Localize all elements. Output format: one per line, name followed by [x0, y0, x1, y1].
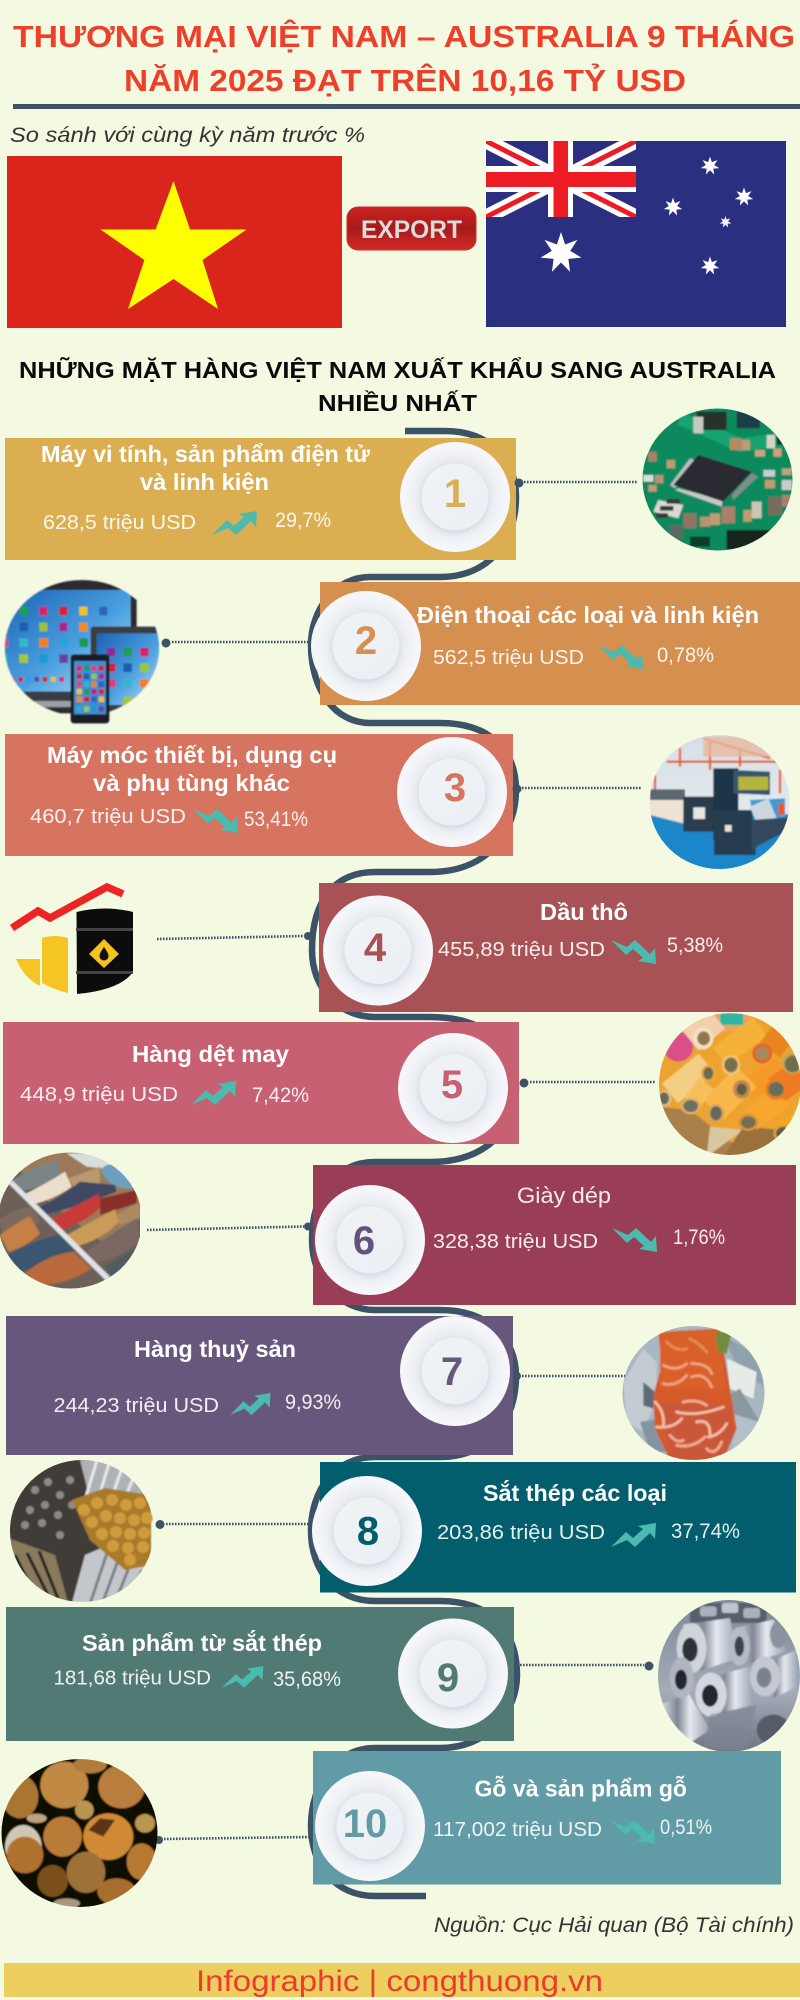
connector 5 — [520, 1078, 655, 1088]
item 1 name: và linh kiện — [140, 469, 269, 495]
panel: item 1 computers — [5, 438, 516, 560]
item 7 value: 244,23 triệu USD — [54, 1395, 219, 1417]
item 2 percent: 0,78% — [657, 644, 714, 667]
number badge 9: 9 — [437, 1656, 459, 1700]
icon: Vietnam flag — [7, 156, 342, 328]
item 9 name: Sản phẩm từ sắt thép — [82, 1629, 322, 1656]
image: tablets and phone — [3, 580, 161, 723]
connector 4 — [157, 932, 312, 940]
connector 2 — [162, 638, 308, 648]
item 3 percent: 53,41% — [244, 808, 308, 831]
arrow: down — [612, 1228, 657, 1252]
snake connector line — [311, 431, 517, 1896]
item 5 name: Hàng dệt may — [132, 1041, 289, 1067]
item 8 percent: 37,74% — [671, 1520, 740, 1543]
number badge 4 — [323, 896, 433, 1006]
item 2 name: Điện thoại các loại và linh kiện — [417, 602, 759, 628]
image: industrial machine — [647, 733, 793, 874]
item 4 name: Dầu thô — [540, 899, 628, 925]
image: shoes on shelf — [0, 1150, 142, 1292]
item 7 name: Hàng thuỷ sản — [134, 1336, 296, 1362]
icon: export button: EXPORT — [361, 216, 462, 244]
arrow: down — [598, 645, 643, 669]
item 4 value: 455,89 triệu USD — [438, 939, 605, 961]
subtitle: comparison note: So sánh với cùng kỳ năm trước % — [10, 124, 365, 147]
item 5 percent: 7,42% — [252, 1084, 309, 1107]
arrow: up — [230, 1393, 270, 1415]
image: shrimp and fish — [622, 1326, 764, 1460]
number badge 3 — [397, 737, 507, 847]
item 3 name: Máy móc thiết bị, dụng cụ — [47, 742, 337, 768]
title — [13, 18, 795, 98]
arrow: up — [611, 1523, 656, 1547]
icon: oil barrel and coins — [12, 887, 133, 994]
panel: item 5 textiles — [3, 1022, 519, 1144]
item 3 name: và phụ tùng khác — [93, 770, 290, 796]
section heading: NHIỀU NHẤT — [318, 389, 477, 416]
image: fabric rolls — [657, 1012, 800, 1158]
arrow: up — [222, 1666, 263, 1688]
image: steel coils — [650, 1598, 800, 1755]
item 9 percent: 35,68% — [273, 1668, 341, 1691]
number badge 6 — [315, 1185, 425, 1295]
panel: item 6 footwear — [313, 1165, 796, 1305]
number badge 10: 10 — [343, 1802, 387, 1846]
arrow: down — [193, 809, 238, 833]
item 3 name — [47, 742, 337, 796]
connector 10 — [155, 1836, 310, 1844]
item 6 value: 328,38 triệu USD — [433, 1231, 598, 1253]
item 2 value: 562,5 triệu USD — [433, 647, 584, 669]
item 10 value: 117,002 triệu USD — [433, 1819, 602, 1841]
item 8 name: Sắt thép các loại — [483, 1479, 667, 1506]
section heading — [19, 356, 776, 416]
number badge 3: 3 — [444, 766, 466, 810]
arrow: down — [611, 940, 656, 964]
arrow: up — [212, 511, 257, 535]
number badge 7 — [400, 1316, 510, 1426]
footer band — [4, 1963, 800, 1998]
item 10 percent: 0,51% — [660, 1816, 712, 1839]
source note: Nguồn: Cục Hải quan (Bộ Tài chính) — [434, 1914, 794, 1937]
number badge 5: 5 — [441, 1063, 463, 1107]
item 5 value: 448,9 triệu USD — [20, 1084, 178, 1106]
number badge 10 — [315, 1771, 425, 1881]
number badge 9 — [398, 1618, 508, 1728]
image: steel bars — [10, 1460, 154, 1602]
number badge 2 — [311, 591, 421, 701]
item 4 percent: 5,38% — [667, 934, 723, 957]
panel: item 9 steel products — [6, 1607, 514, 1741]
number badge 8: 8 — [357, 1510, 379, 1554]
item 8 value: 203,86 triệu USD — [437, 1522, 605, 1544]
number badge 8 — [312, 1476, 422, 1586]
item 1 value: 628,5 triệu USD — [43, 512, 196, 534]
panel: item 2 phones — [311, 582, 800, 705]
connector 6 — [147, 1222, 312, 1230]
item 10 name: Gỗ và sản phẩm gỗ — [474, 1774, 687, 1802]
icon: export button — [347, 207, 476, 250]
item 6 percent: 1,76% — [673, 1226, 725, 1249]
title: NĂM 2025 ĐẠT TRÊN 10,16 TỶ USD — [124, 62, 686, 98]
icon: Australia flag — [486, 141, 786, 327]
connector 1 — [514, 478, 638, 488]
footer band: Infographic | congthuong.vn — [196, 1965, 603, 1998]
number badge 7: 7 — [441, 1350, 463, 1394]
panel: item 7 seafood — [6, 1316, 513, 1455]
connector 9 — [520, 1662, 654, 1670]
panel: item 10 wood — [313, 1751, 781, 1884]
panel: item 3 machinery — [5, 734, 513, 856]
arrow: down — [610, 1820, 655, 1844]
item 1 name: Máy vi tính, sản phẩm điện tử — [41, 441, 370, 467]
number badge 6: 6 — [353, 1219, 375, 1263]
item 7 percent: 9,93% — [285, 1391, 341, 1414]
connector 7 — [513, 1372, 625, 1380]
panel: item 4 crude oil — [319, 883, 793, 1012]
item 1 percent: 29,7% — [275, 509, 331, 532]
title: THƯƠNG MẠI VIỆT NAM – AUSTRALIA 9 THÁNG — [13, 18, 795, 54]
item 1 name — [41, 441, 370, 495]
connector 8 — [156, 1520, 308, 1529]
number badge 1: 1 — [444, 472, 466, 516]
connector 3 — [512, 784, 642, 794]
item 6 name: Giày dép — [517, 1183, 611, 1208]
item 3 value: 460,7 triệu USD — [30, 806, 186, 828]
number badge 4: 4 — [364, 926, 387, 970]
item 9 value: 181,68 triệu USD — [54, 1668, 211, 1690]
number badge 2: 2 — [355, 619, 377, 663]
number badge 5 — [398, 1033, 508, 1143]
image: circuit board — [642, 408, 792, 550]
panel: item 8 steel — [312, 1462, 796, 1592]
section heading: NHỮNG MẶT HÀNG VIỆT NAM XUẤT KHẨU SANG AUSTRALIA — [19, 356, 776, 383]
arrow: up — [191, 1081, 236, 1105]
image: timber logs — [0, 1757, 160, 1908]
number badge 1 — [400, 442, 510, 552]
